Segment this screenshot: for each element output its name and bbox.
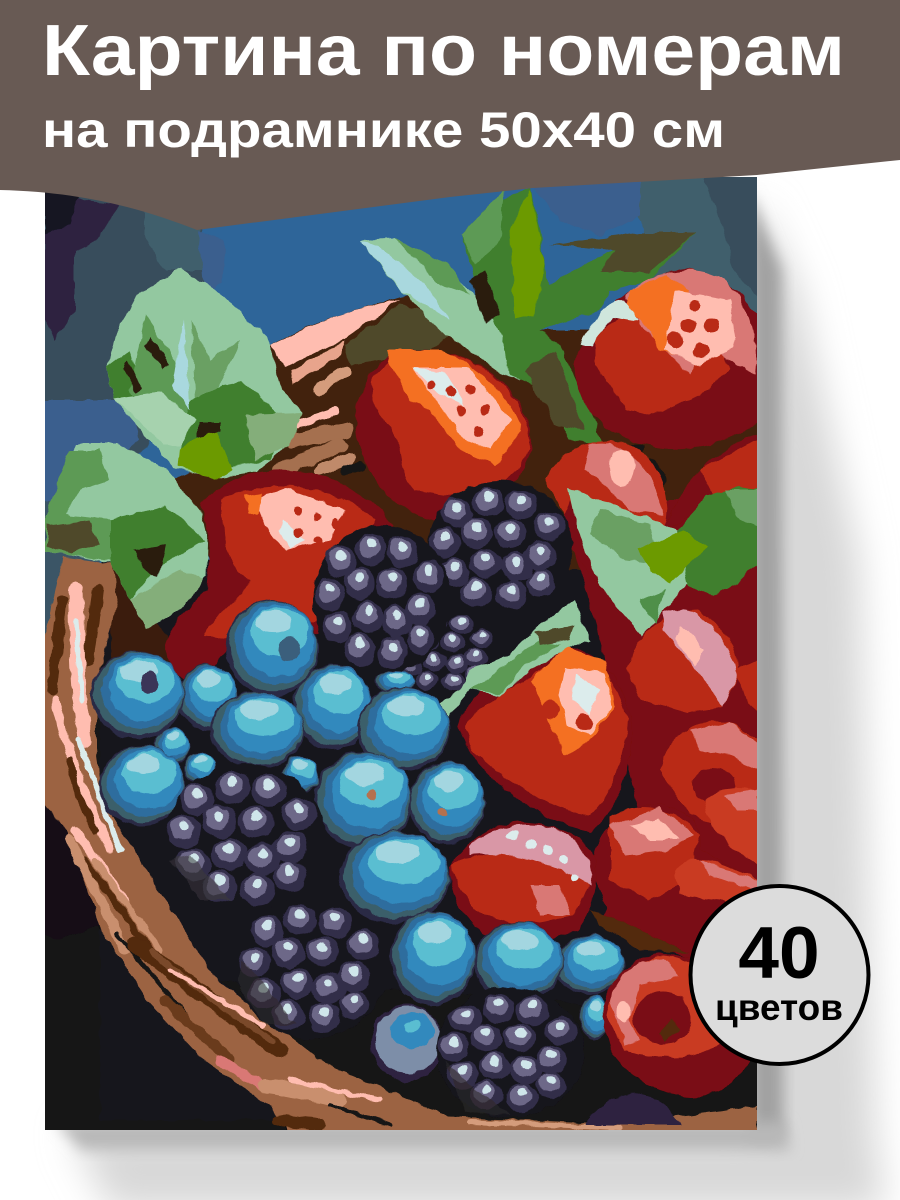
dark berry shadow, bottom: [585, 1095, 680, 1125]
blackberry, bottom: [436, 987, 584, 1117]
title: Картина по номерам: [42, 11, 845, 91]
painting: berries in a basket: [35, 167, 767, 1140]
badge: 40 colours: [690, 886, 868, 1064]
leaves, mint right: [568, 487, 767, 635]
header banner: [0, 0, 900, 230]
strawberry, top right: [575, 268, 767, 448]
strawberry, upper left: [165, 470, 395, 683]
painting background: [35, 167, 767, 1140]
blueberries: [92, 600, 485, 849]
basket, front rim: [35, 557, 757, 1140]
canvas shadow: [55, 190, 885, 1200]
blackberries, centre: [313, 480, 572, 694]
badge: 40 colours: цветов: [715, 987, 843, 1028]
strawberry, top centre: [355, 350, 532, 522]
raspberry, pale centre: [450, 822, 596, 945]
raspberry, bottom right: [602, 953, 755, 1097]
badge: 40 colours: 40: [738, 913, 820, 994]
dark red shadow mass, right: [560, 500, 767, 960]
raspberries, right: [627, 610, 767, 870]
blueberries, lower: [340, 831, 625, 1081]
strawberry, centre: [432, 600, 631, 832]
leaves, lower left: [45, 268, 303, 628]
blackberry, lower: [237, 897, 387, 1039]
leaves, top: [360, 188, 695, 445]
subtitle: на подрамнике 50х40 см: [42, 102, 725, 158]
raspberry, large lower right: [590, 805, 767, 960]
blackberry, left: [165, 764, 325, 912]
basket, rear rim: [170, 296, 767, 570]
raspberries, upper: [545, 430, 767, 590]
